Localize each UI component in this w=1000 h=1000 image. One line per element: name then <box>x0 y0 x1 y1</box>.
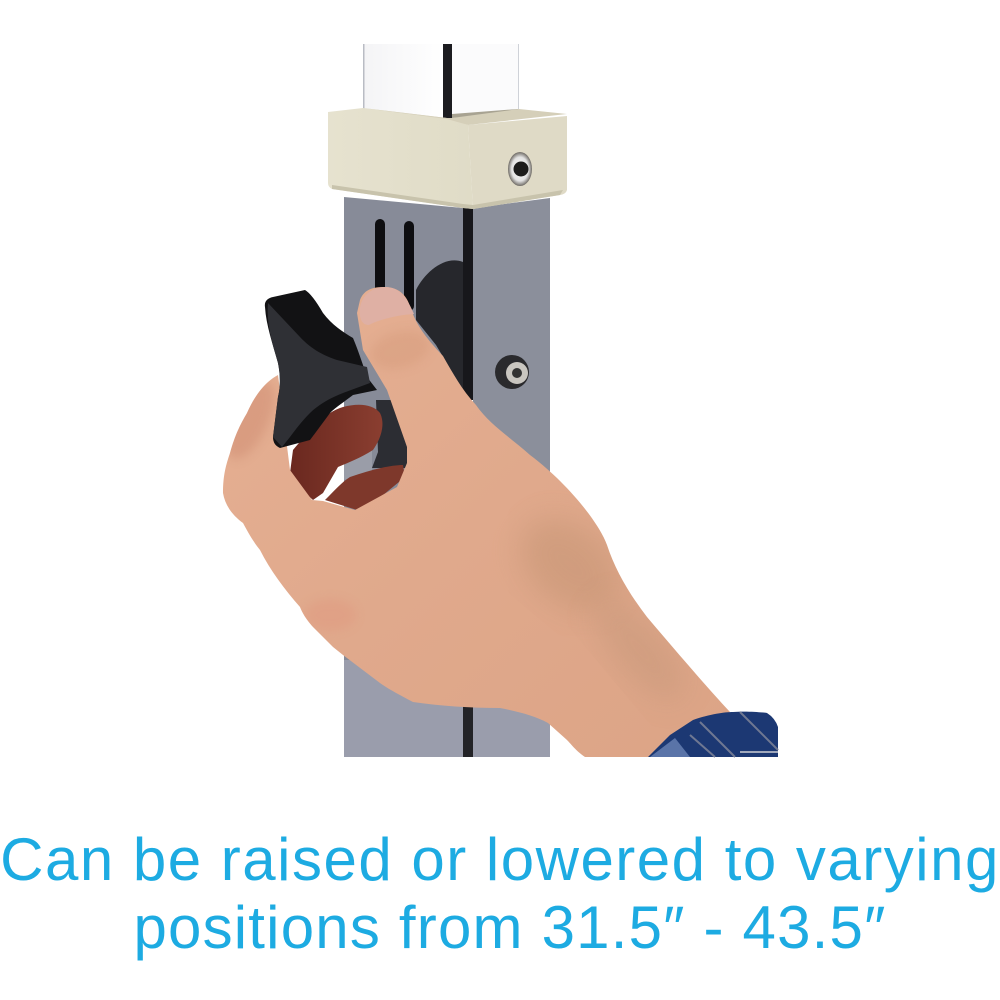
caption line 1: Can be raised or lowered to varying <box>0 826 1000 893</box>
hand shading <box>216 325 699 714</box>
beige collar <box>328 108 567 209</box>
black knob <box>265 290 377 448</box>
chrome upper tube <box>363 44 519 120</box>
shirt cuff <box>648 712 778 757</box>
post bolt <box>495 355 529 389</box>
product photo: adjustable post with hand turning knob <box>223 44 779 758</box>
fingers behind knob <box>290 405 405 510</box>
collar bolt <box>508 152 532 186</box>
hand <box>216 287 730 757</box>
caption line 2: positions from 31.5″ - 43.5″ <box>133 894 887 961</box>
thumbnail <box>360 287 414 325</box>
lower metal post <box>344 197 550 757</box>
